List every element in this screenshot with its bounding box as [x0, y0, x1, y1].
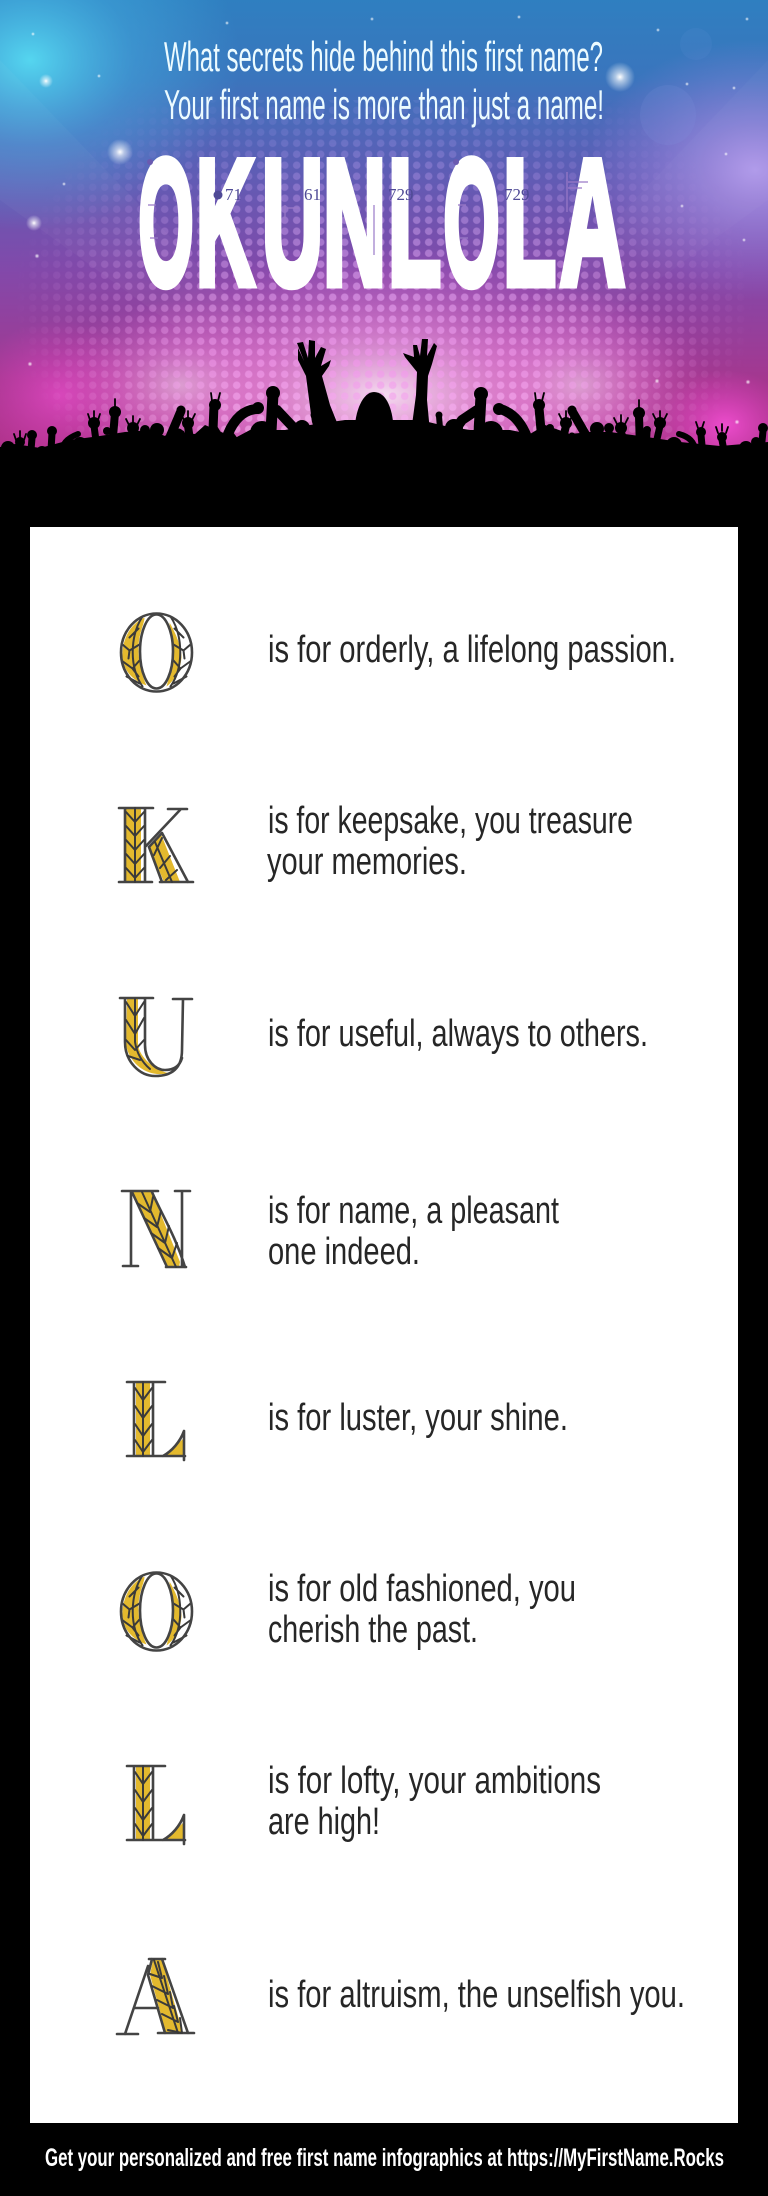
row 4: N [122, 1190, 559, 1273]
text: N meaning: is for name, a pleasant [268, 1190, 559, 1232]
text: L meaning: is for lofty, your ambitions [268, 1760, 601, 1802]
title: OKUNLOLA: O [444, 123, 500, 322]
row 6: O: cherish the past. [268, 1609, 478, 1651]
icon: wheat letter O [121, 614, 192, 692]
icon: wheat letter L [127, 1766, 185, 1844]
icon: wheat letter A [117, 1959, 194, 2034]
title: OKUNLOLA: 729 [388, 185, 414, 204]
row 2: K: your memories. [267, 841, 467, 883]
text: K meaning: is for keepsake, you treasure [268, 800, 633, 842]
text: U meaning: is for useful, always to others. [268, 1013, 648, 1055]
crowd: heads [1, 392, 753, 470]
title: OKUNLOLA: N [323, 123, 386, 322]
row 8: A [117, 1959, 685, 2034]
title: OKUNLOLA: U [262, 123, 323, 322]
icon: wheat letter N [122, 1191, 190, 1267]
icon: wheat letter L [127, 1382, 185, 1460]
title: OKUNLOLA: L [503, 123, 556, 322]
row 7: L [127, 1760, 601, 1844]
header background: concert lights [0, 0, 768, 448]
title: OKUNLOLA: A [560, 123, 625, 322]
crowd: solid base [0, 420, 768, 527]
row 6: O [121, 1568, 576, 1651]
white content panel [30, 527, 738, 2123]
row 4: N: one indeed. [268, 1231, 420, 1273]
icon: wheat letter K [119, 808, 193, 882]
title: OKUNLOLA: 729 [504, 185, 530, 204]
title: OKUNLOLA [138, 123, 625, 322]
title: OKUNLOLA: K [196, 123, 254, 322]
row 2: K [119, 800, 633, 883]
row 7: L: are high! [268, 1801, 380, 1843]
subtitle: two lines [164, 33, 604, 128]
row 1: O [121, 614, 676, 692]
crowd: raised arms [16, 394, 763, 470]
title: OKUNLOLA: 71 [225, 185, 242, 204]
crowd silhouette [0, 339, 768, 527]
title: OKUNLOLA: O [138, 123, 194, 322]
crowd: central figure with raised arms [297, 339, 445, 460]
icon: wheat letter U [120, 998, 192, 1076]
crowd: hands and fists [15, 386, 768, 447]
sparkles [26, 15, 750, 424]
title: OKUNLOLA: 61 [304, 185, 321, 204]
title: OKUNLOLA: L [388, 123, 441, 322]
row 5: L [127, 1382, 568, 1460]
text: L meaning: is for luster, your shine. [268, 1397, 568, 1439]
text: O meaning: is for old fashioned, you [268, 1568, 576, 1610]
icon: wheat letter O [121, 1572, 192, 1650]
row 3: U [120, 998, 648, 1076]
